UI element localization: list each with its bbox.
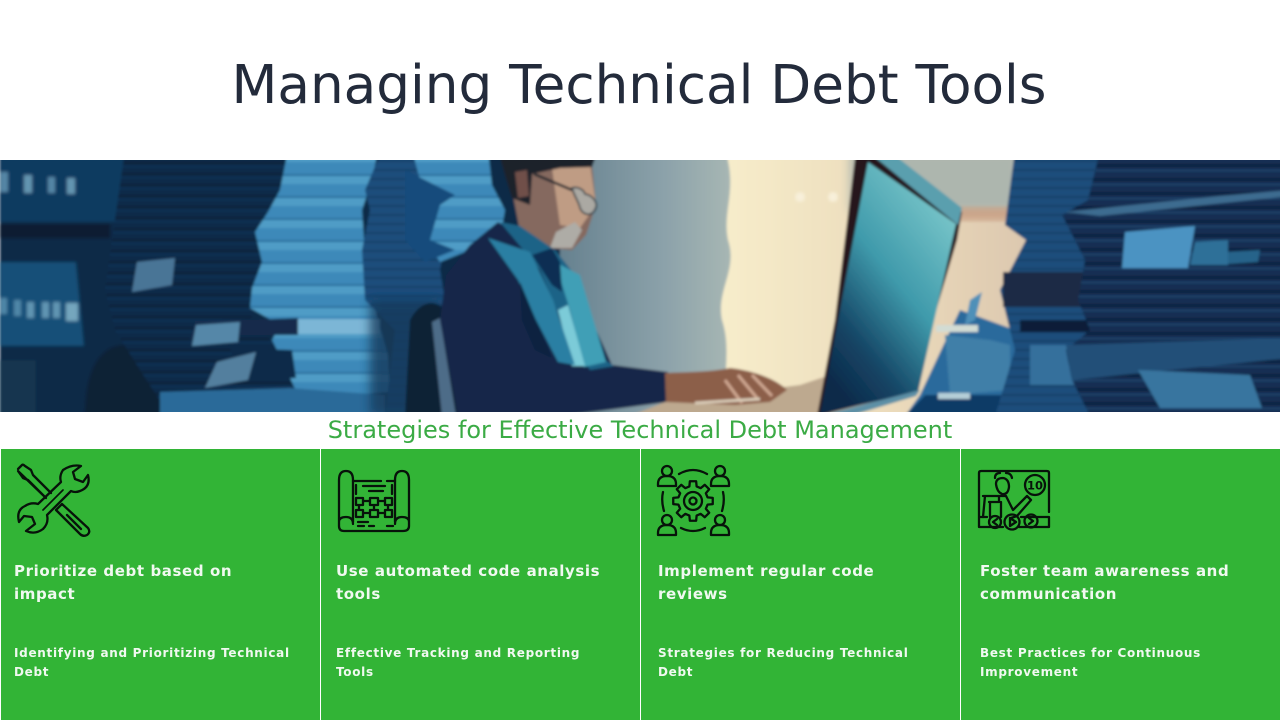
laptop screen [817,150,962,416]
right loose papers [1065,190,1280,408]
icon: gear with team around it [656,464,730,536]
tie [532,248,562,292]
dark overlaps and loose paper tabs [132,258,385,416]
neck and head [512,165,596,250]
paper stack: left dark pile [114,160,292,398]
card 4 heading: Foster team awareness and communication [980,562,1229,603]
card 2 description: Effective Tracking and Reporting Tools [336,646,580,679]
bookshelf at left [0,150,165,416]
lapel [488,238,575,365]
icon: presenter with video controls [978,470,1050,531]
card 2 heading: Use automated code analysis tools [336,562,600,603]
paper stack: second pile light side [412,150,505,262]
icon: crossed wrench and screwdriver [16,464,90,537]
paper stack: second pile [360,160,445,412]
paper stack: left light pile [250,150,390,400]
panel: card 2 background [321,449,640,720]
icon: presenter with video controls: 10 [1027,478,1043,492]
desk [636,376,830,412]
card 3 heading: Implement regular code reviews [658,562,874,603]
background tones [0,160,1028,412]
card 1 heading: Prioritize debt based on impact [14,562,232,603]
card 3 description: Strategies for Reducing Technical Debt [658,646,909,679]
card 1 description: Identifying and Prioritizing Technical Debt [14,646,290,679]
subtitle: Strategies for Effective Technical Debt Management [328,416,952,444]
icon: blueprint scroll [338,470,410,532]
title: Managing Technical Debt Tools [231,54,1047,116]
panel: card 4 background [961,449,1280,720]
collar and shirt front [500,222,614,370]
glasses [534,174,572,190]
office chair [405,303,460,416]
hands on keyboard [665,368,787,405]
man at desk [440,150,668,416]
card 4 description: Best Practices for Continuous Improvement [980,646,1201,679]
panel: card 3 background [641,449,960,720]
jacket [440,222,668,416]
hero image: developer working among stacks of paper [0,160,1280,412]
panel: card 1 background [1,449,320,720]
desk items behind the laptop [905,292,1015,416]
paper stack: right pile back [996,160,1099,412]
paper stack: right pile front [1062,150,1280,416]
